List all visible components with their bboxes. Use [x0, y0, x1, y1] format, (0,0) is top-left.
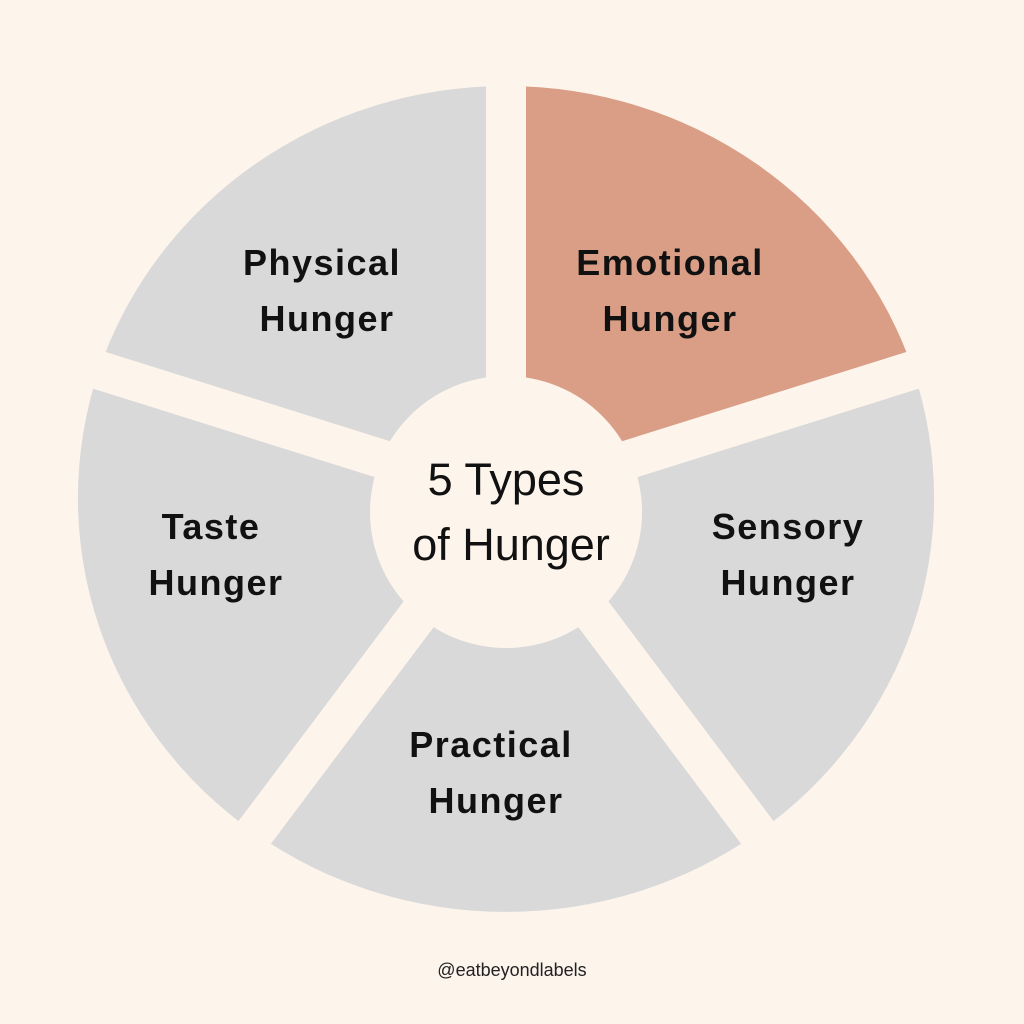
segment: physical hunger [99, 86, 506, 498]
label: physical hunger: Physical [243, 242, 401, 283]
segment: sensory hunger [506, 370, 934, 833]
label: practical hunger: Practical [409, 724, 573, 765]
label: taste hunger: Taste [162, 506, 260, 547]
segment: emotional hunger [506, 86, 913, 498]
center circle [370, 376, 642, 648]
label: physical hunger: Hunger [260, 298, 394, 339]
center title: of Hunger [412, 519, 610, 570]
label: sensory hunger: Hunger [720, 562, 856, 603]
label: sensory hunger: Sensory [712, 506, 864, 547]
footer handle: @eatbeyondlabels [437, 960, 587, 980]
label: taste hunger: Hunger [148, 562, 284, 603]
label: emotional hunger: Hunger [602, 298, 738, 339]
label: practical hunger: Hunger [428, 780, 564, 821]
segment: taste hunger [78, 370, 506, 833]
label: emotional hunger: Emotional [576, 242, 764, 283]
center title: 5 Types [428, 454, 584, 505]
segment: practical hunger [254, 498, 758, 912]
